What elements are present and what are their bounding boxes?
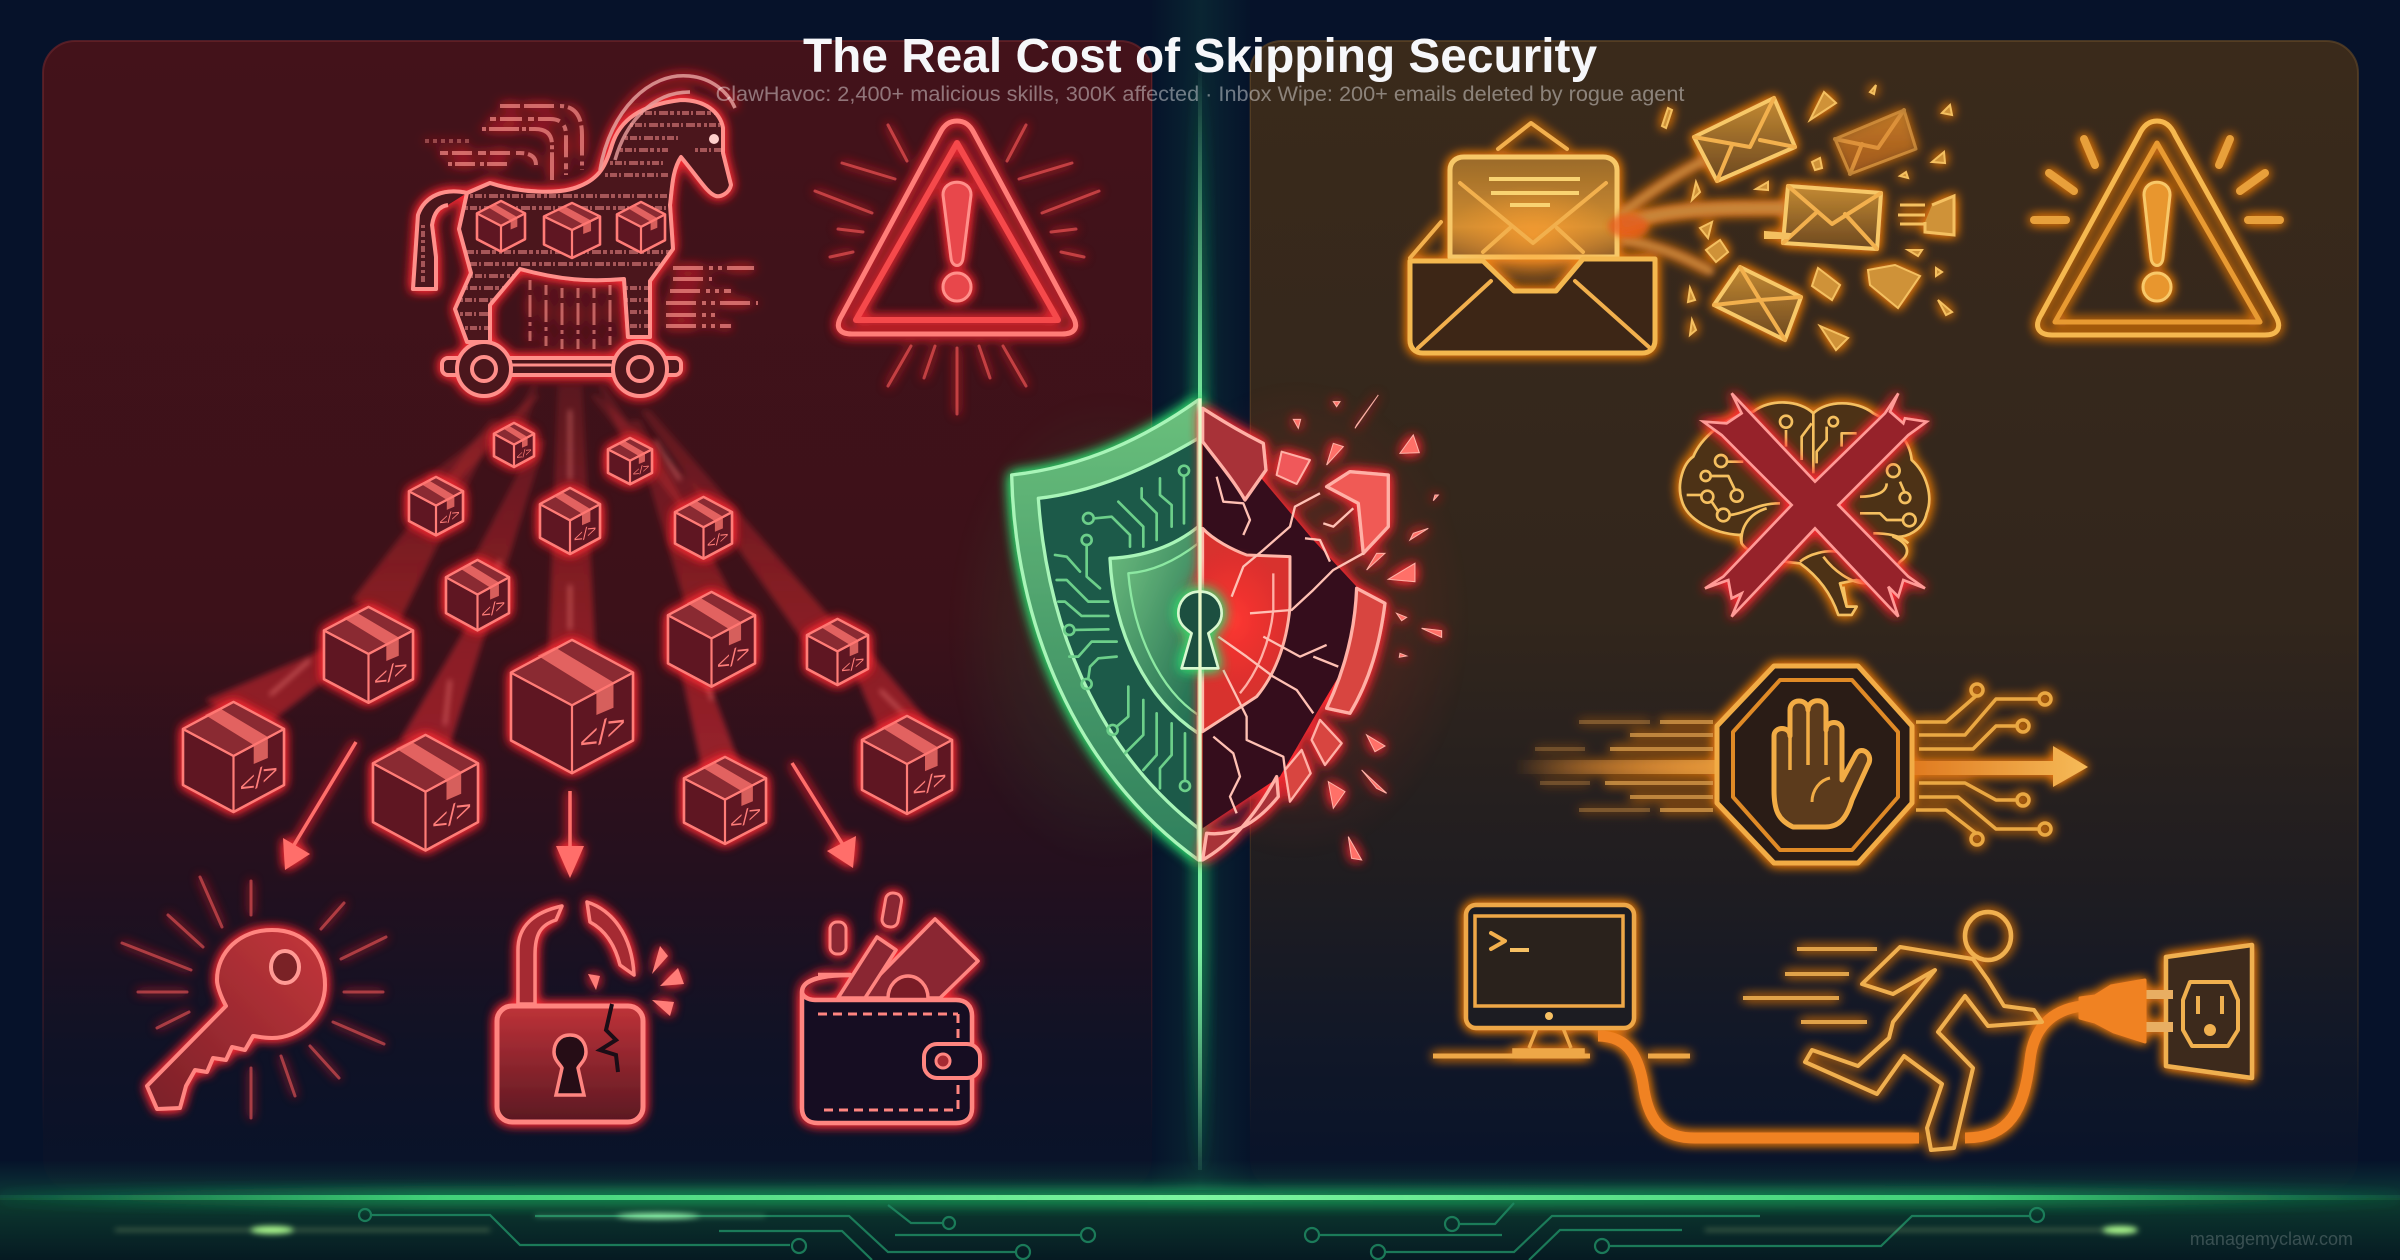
right box in belly [617, 202, 665, 253]
wallet stitching [818, 1014, 958, 1110]
circuit traces [1055, 466, 1190, 791]
envelope fragment [1925, 196, 1954, 235]
exclamation mark [943, 182, 971, 266]
shackle broken side [587, 902, 634, 975]
package 12 [373, 735, 478, 850]
package 3: </> [439, 506, 460, 531]
wallet body [802, 975, 972, 1123]
subtitle: ClawHavoc: 2,400+ malicious skills, 300K affected · Inbox Wipe: 200+ emails deleted by rogue agent [716, 81, 1684, 106]
package 8: </> [717, 637, 750, 679]
green half [1012, 400, 1198, 860]
package 7: </> [374, 653, 407, 695]
inner shield [1110, 527, 1198, 733]
falling coin 2 [830, 922, 846, 954]
horse mane [600, 76, 735, 170]
central box in belly [544, 203, 600, 258]
amber dot [2143, 273, 2171, 301]
package 10: </> [580, 703, 625, 762]
runner body [1805, 947, 2042, 1150]
envelope creases [1418, 281, 1491, 348]
illustration: fan of streaks from the cart [205, 385, 935, 770]
package 5: </> [707, 527, 728, 554]
outgoing arrow [1912, 746, 2088, 787]
letter glow [1448, 185, 1618, 285]
arrow: to stolen key [283, 742, 356, 870]
wheeled cart [442, 342, 681, 396]
flying shards [1293, 395, 1442, 860]
icon: stolen key with rays [122, 877, 386, 1118]
horse tail [413, 191, 467, 289]
letter in envelope [1450, 157, 1617, 257]
monitor screen [1475, 916, 1623, 1006]
incoming speed lines [1535, 722, 1713, 810]
amber triangle outer [2038, 121, 2279, 335]
horse eye [709, 134, 719, 144]
triangle outline [838, 121, 1076, 334]
lower rim chunk [1203, 777, 1278, 860]
central divider line [1198, 60, 1202, 1170]
panel: supply-chain attack (left, red) [43, 41, 1152, 1191]
package 10 [511, 640, 633, 773]
main incoming streak [1514, 760, 1718, 774]
triangle inner outline [856, 143, 1058, 320]
circuit lines out [1916, 684, 2051, 845]
code lines right [666, 268, 758, 326]
package 7 [324, 607, 413, 703]
plug prongs [2145, 990, 2173, 999]
clasp button [936, 1054, 950, 1068]
desk [1433, 1054, 1690, 1058]
inner shield rim lines [1240, 573, 1273, 693]
envelope crease right [1575, 281, 1650, 348]
key body [147, 930, 325, 1109]
octagon inner [1733, 680, 1898, 850]
package 8 [668, 592, 755, 687]
envelope side [1410, 222, 1441, 258]
letter chevron [1460, 183, 1606, 243]
package 11: </> [240, 754, 278, 803]
inner shield red [1203, 528, 1290, 732]
icon: broken padlock [497, 902, 684, 1122]
burst core [1608, 214, 1648, 238]
power dot [1545, 1012, 1553, 1020]
letter flap [1498, 123, 1567, 149]
wallet clasp [924, 1044, 980, 1078]
runner head [1965, 912, 2011, 960]
lock body [497, 1006, 643, 1122]
key rays [122, 877, 386, 1118]
flying envelope 4 [1714, 267, 1801, 340]
second banknote [838, 937, 896, 998]
terminal prompt [1491, 933, 1505, 949]
ring chunk [1327, 588, 1385, 713]
shield centre seam [1198, 398, 1202, 862]
amber rays [2034, 139, 2280, 220]
code lines left [425, 106, 582, 180]
lock crack [600, 1004, 618, 1072]
shield halo [947, 390, 1267, 870]
keyhole [554, 1035, 586, 1095]
amber exclamation [2144, 182, 2170, 266]
package 11 [183, 702, 284, 812]
falling code lines [530, 280, 610, 350]
package 2: </> [633, 459, 649, 481]
brain outline [1680, 402, 1929, 615]
prompt cursor [1510, 948, 1529, 952]
flying envelope 2, dim [1835, 110, 1916, 174]
icon: terminal, runner pulling the plug [1433, 905, 2252, 1150]
banknote [857, 919, 978, 998]
fracture halo [1123, 380, 1470, 860]
amber triangle inner [2055, 143, 2260, 322]
speed lines [1743, 949, 1877, 1022]
finger separators [1790, 708, 1826, 770]
bottom circuit strip [0, 1160, 2400, 1260]
socket face [2183, 982, 2238, 1046]
arrow: to broken lock [556, 791, 584, 878]
package 2 [608, 438, 652, 484]
red X [1703, 393, 1927, 617]
icon: red warning triangle [815, 121, 1099, 414]
key hole [271, 951, 299, 983]
lock shards [588, 946, 684, 1016]
big floating chunk [1327, 472, 1388, 553]
shackle [518, 906, 562, 1004]
package 1: </> [516, 445, 532, 464]
monitor stand [1514, 1028, 1583, 1054]
small chunk [1277, 452, 1310, 484]
monitor [1466, 905, 1634, 1028]
package 5 [675, 497, 732, 559]
envelope front [1410, 259, 1655, 353]
package 13: </> [730, 798, 761, 837]
dark base of shield [1203, 440, 1357, 828]
falling malicious skill packages [183, 423, 952, 850]
flying envelope 3 [1783, 186, 1881, 249]
watermark: managemyclaw.com [2190, 1229, 2353, 1249]
crack lines [1213, 477, 1363, 813]
package 13 [684, 757, 766, 844]
icon: brain crossed out [1680, 393, 1929, 617]
falling coin [881, 892, 903, 928]
exclamation dot [943, 273, 971, 301]
lower chunks [1312, 720, 1342, 765]
warning rays [815, 125, 1099, 414]
wall socket plate [2166, 945, 2252, 1078]
flying envelope 1 [1694, 98, 1795, 181]
icon: amber warning triangle [2034, 121, 2280, 335]
letter lower creases [1483, 228, 1583, 252]
octagon [1717, 666, 1912, 863]
boxes in belly [477, 201, 525, 252]
tail code [421, 225, 425, 284]
arrow: to wallet [792, 763, 856, 868]
fragment speed lines [1898, 205, 1925, 224]
coin in note [888, 976, 928, 998]
palm crease [1812, 778, 1830, 802]
top rim chunk [1203, 408, 1266, 500]
code texture [460, 113, 725, 328]
package 14: </> [913, 763, 946, 806]
icon: drained wallet [802, 892, 980, 1123]
burst streaks [1620, 160, 1785, 272]
package 1 [494, 423, 534, 467]
icon: inbox blown open [1410, 85, 1954, 353]
central channel [1152, 0, 1250, 1190]
envelope shards [1662, 85, 1952, 350]
package 9 [807, 619, 868, 685]
hand [1774, 701, 1870, 827]
red half fractured [1177, 395, 1442, 860]
package 6 [446, 560, 509, 630]
title: The Real Cost of Skipping Security [803, 30, 1597, 83]
package 9: </> [841, 650, 864, 680]
letter text lines [1489, 179, 1580, 205]
bright streak sparks [270, 410, 905, 725]
keyhole [1178, 592, 1222, 668]
socket holes [2198, 996, 2222, 1034]
package 4: </> [574, 519, 596, 549]
package 4 [540, 488, 600, 554]
icon: trojan horse [413, 76, 758, 396]
plug prong 2 [2145, 1022, 2173, 1032]
cable [1598, 1006, 2082, 1138]
hot glow at core [1177, 547, 1290, 693]
package 6: </> [481, 593, 505, 625]
package 12: </> [432, 790, 471, 841]
panel: rogue agent (right, amber) [1250, 41, 2358, 1191]
package 3 [409, 477, 463, 535]
icon: split shield [947, 380, 1470, 870]
plug body [2080, 980, 2145, 1042]
package 14 [862, 716, 952, 814]
icon: stop hand with speed lines and circuits [1514, 666, 2088, 863]
horse body [455, 100, 731, 342]
